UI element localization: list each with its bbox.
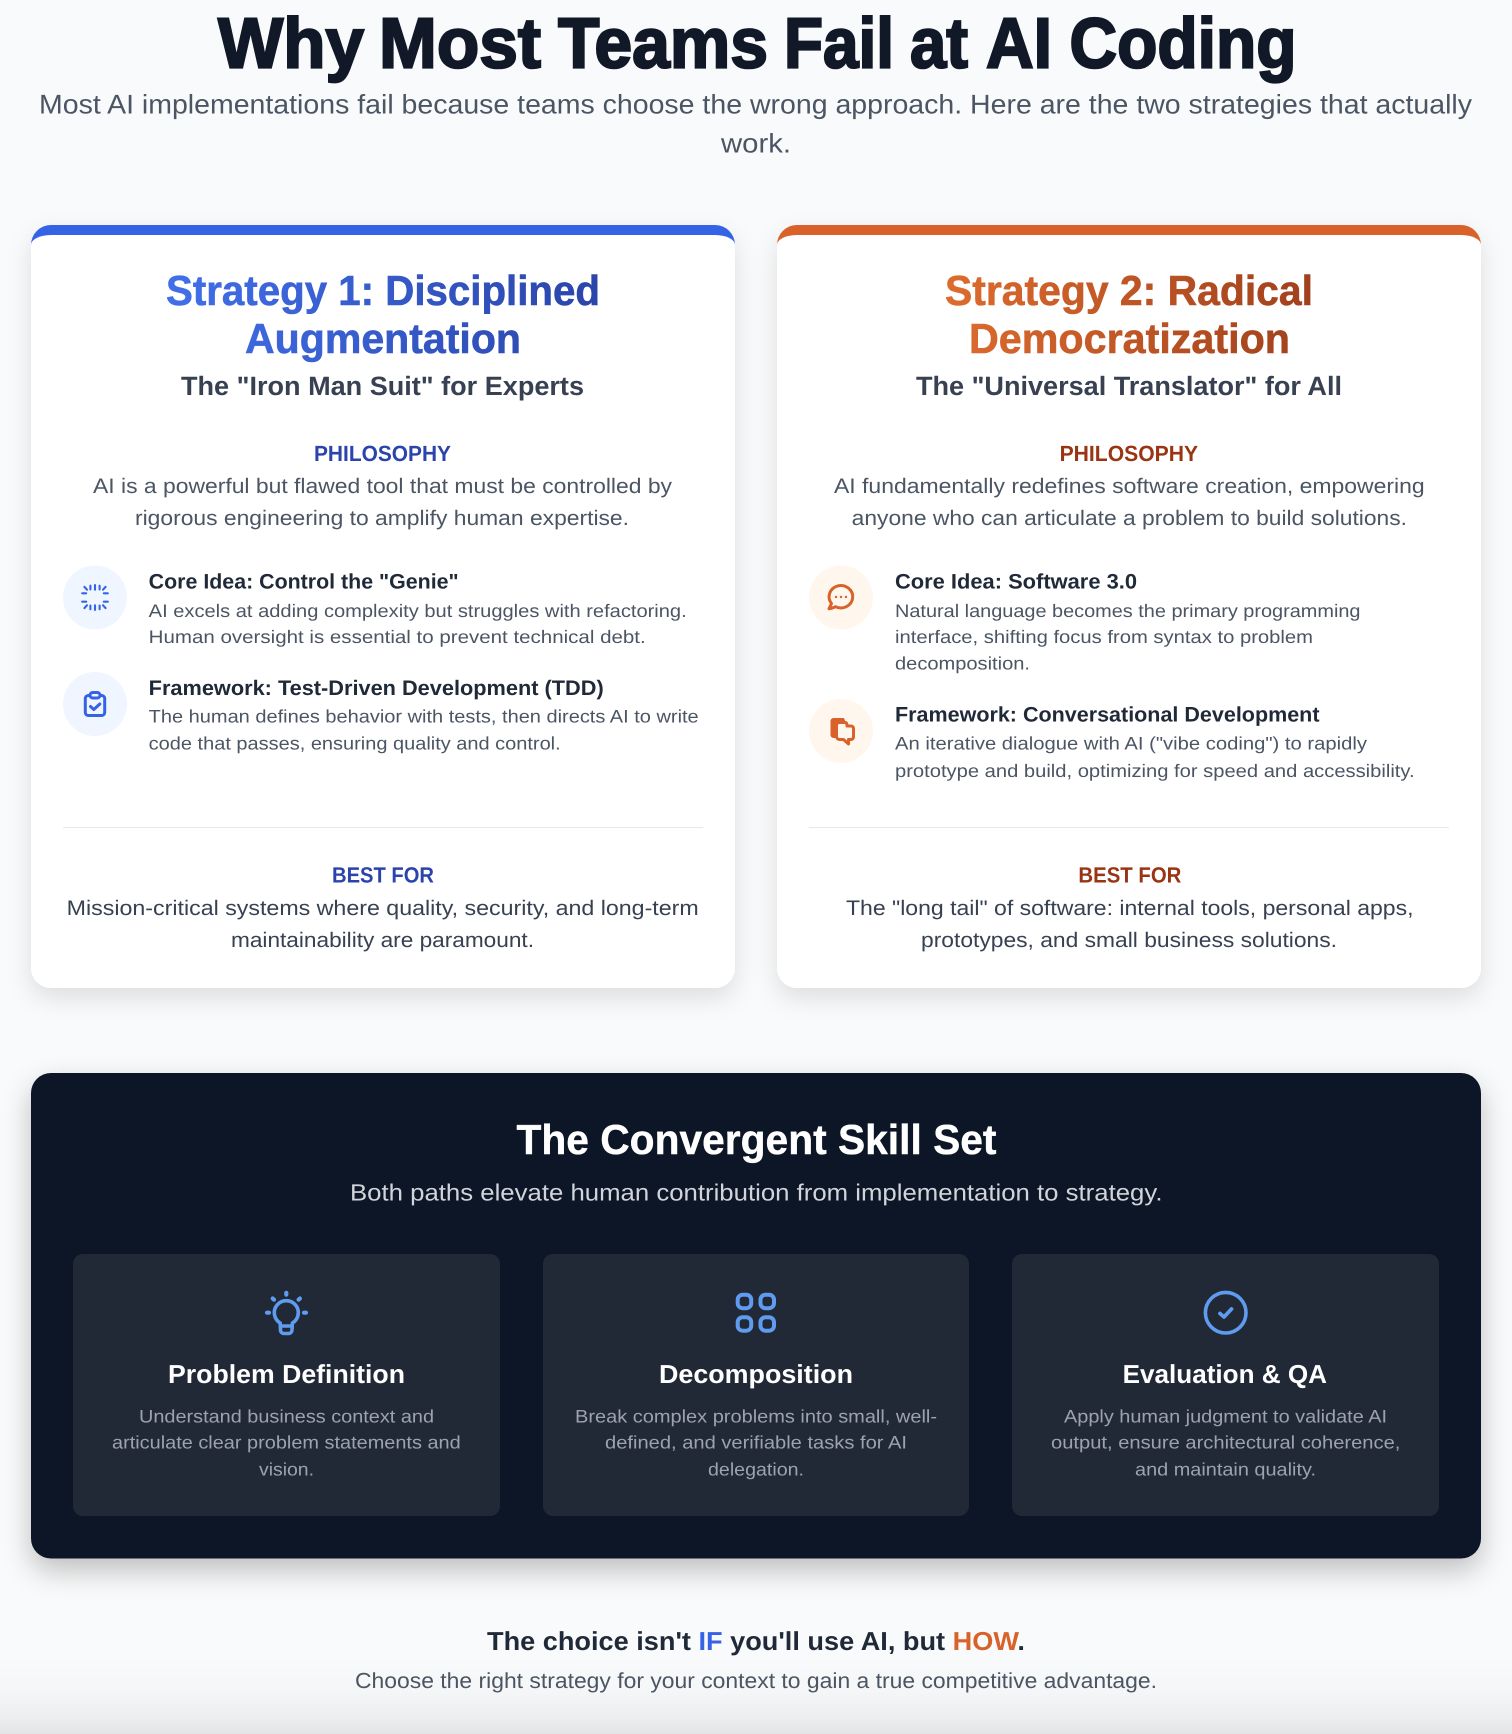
best for text	[67, 897, 699, 952]
card description: Break complex problems into small, well-	[575, 1407, 937, 1427]
philosophy text: anyone who can articulate a problem to build solutions.	[852, 507, 1407, 530]
best for text: maintainability are paramount.	[231, 929, 534, 952]
subheading: universal translator: The "Universal Translator" for All	[916, 371, 1342, 401]
philosophy label: PHILOSOPHY	[314, 441, 451, 466]
heading: strategy 1: Augmentation	[245, 315, 521, 362]
panel: the convergent skill set	[31, 1073, 1481, 1558]
subtitle: Most AI implementations fail because teams choose the wrong approach. Here are the two strategies that actually	[39, 90, 1473, 120]
icon: sparkle ring	[63, 566, 127, 630]
card description	[575, 1407, 937, 1479]
card description: articulate clear problem statements and	[112, 1433, 461, 1453]
card description: delegation.	[708, 1459, 804, 1479]
panel: strategy 2	[777, 225, 1481, 988]
subtitle: work.	[720, 128, 791, 158]
card: problem definition	[73, 1254, 500, 1516]
core idea: control the genie: Core Idea: Control the "Genie"	[149, 571, 459, 594]
framework: test-driven development: Framework: Test-Driven Development (TDD)	[149, 677, 604, 700]
best for text: prototypes, and small business solutions.	[921, 929, 1337, 952]
icon: four squares	[738, 1295, 774, 1331]
best for label: BEST FOR	[1078, 863, 1181, 888]
title: Most	[379, 4, 541, 84]
core idea: software 3.0: Core Idea: Software 3.0	[895, 570, 1137, 593]
subtitle	[39, 90, 1473, 158]
closing subtext: Choose the right strategy for your context to gain a true competitive advantage.	[355, 1668, 1157, 1693]
card description: Apply human judgment to validate AI	[1064, 1407, 1387, 1427]
icon: two speech bubbles	[809, 699, 873, 763]
card background: strategy 2	[777, 225, 1481, 988]
card description: Understand business context and	[139, 1407, 434, 1427]
dark background	[31, 1073, 1481, 1558]
card description	[1051, 1407, 1400, 1479]
subheading: iron man suit: The "Iron Man Suit" for Experts	[181, 371, 584, 401]
philosophy text: rigorous engineering to amplify human expertise.	[135, 507, 629, 530]
core idea: control the genie: Human oversight is essential to prevent technical debt.	[149, 627, 646, 647]
core idea: software 3.0: decomposition.	[895, 653, 1030, 673]
philosophy text: AI fundamentally redefines software creation, empowering	[834, 475, 1425, 498]
title: AI	[986, 4, 1052, 84]
framework: conversational development: Framework: Conversational Development	[895, 704, 1320, 727]
card description: output, ensure architectural coherence,	[1051, 1433, 1400, 1453]
philosophy label: PHILOSOPHY	[1060, 441, 1198, 466]
framework: test-driven development: code that passes, ensuring quality and control.	[149, 733, 561, 753]
panel: strategy 1	[31, 225, 735, 988]
framework: test-driven development	[149, 677, 699, 753]
icon: chat bubble	[809, 566, 873, 630]
title: at	[910, 4, 968, 84]
title: Coding	[1070, 4, 1296, 84]
framework: test-driven development: The human defines behavior with tests, then directs AI to write	[149, 707, 699, 727]
philosophy text	[93, 475, 673, 530]
heading: strategy 2	[945, 267, 1313, 362]
best for text: The "long tail" of software: internal tools, personal apps,	[846, 897, 1414, 920]
framework: conversational development: prototype and build, optimizing for speed and accessibility.	[895, 761, 1415, 781]
core idea: software 3.0	[895, 570, 1360, 673]
title: Why	[218, 4, 364, 84]
best for text	[846, 897, 1414, 952]
core idea: control the genie: AI excels at adding complexity but struggles with refactoring.	[149, 601, 687, 621]
best for label: BEST FOR	[332, 863, 434, 888]
heading: strategy 1	[166, 267, 600, 362]
closing statement: The choice isn't IF you'll use AI, but HOW.	[487, 1626, 1025, 1656]
philosophy text: AI is a powerful but flawed tool that must be controlled by	[93, 475, 673, 498]
card title: Problem Definition	[168, 1359, 405, 1389]
title: Fail	[784, 4, 894, 84]
card background: strategy 1	[31, 225, 735, 988]
heading: strategy 2: Democratization	[969, 315, 1290, 362]
icon: light bulb	[267, 1293, 306, 1334]
title	[218, 4, 1296, 84]
core idea: software 3.0: interface, shifting focus from syntax to problem	[895, 627, 1313, 647]
card description: and maintain quality.	[1135, 1459, 1316, 1479]
framework: conversational development	[895, 704, 1415, 781]
section heading: The Convergent Skill Set	[516, 1116, 997, 1163]
framework: conversational development: An iterative dialogue with AI ("vibe coding") to rapidly	[895, 733, 1368, 753]
section subtitle: Both paths elevate human contribution from implementation to strategy.	[350, 1180, 1162, 1206]
card description	[112, 1407, 461, 1479]
best for text: Mission-critical systems where quality, security, and long-term	[67, 897, 699, 920]
card description: defined, and verifiable tasks for AI	[605, 1433, 907, 1453]
card title: Evaluation & QA	[1123, 1359, 1327, 1389]
heading: strategy 2: Strategy 2: Radical	[945, 267, 1313, 314]
card: decomposition	[543, 1254, 969, 1516]
card title: Decomposition	[659, 1359, 853, 1389]
icon: clipboard check	[63, 672, 127, 736]
core idea: software 3.0: Natural language becomes the primary programming	[895, 601, 1360, 621]
card: evaluation and qa	[1012, 1254, 1439, 1516]
card description: vision.	[259, 1459, 314, 1479]
core idea: control the genie	[149, 571, 687, 647]
heading: strategy 1: Strategy 1: Disciplined	[166, 267, 600, 314]
philosophy text	[834, 475, 1425, 530]
title: Teams	[558, 4, 768, 84]
icon: check circle	[1205, 1292, 1246, 1333]
